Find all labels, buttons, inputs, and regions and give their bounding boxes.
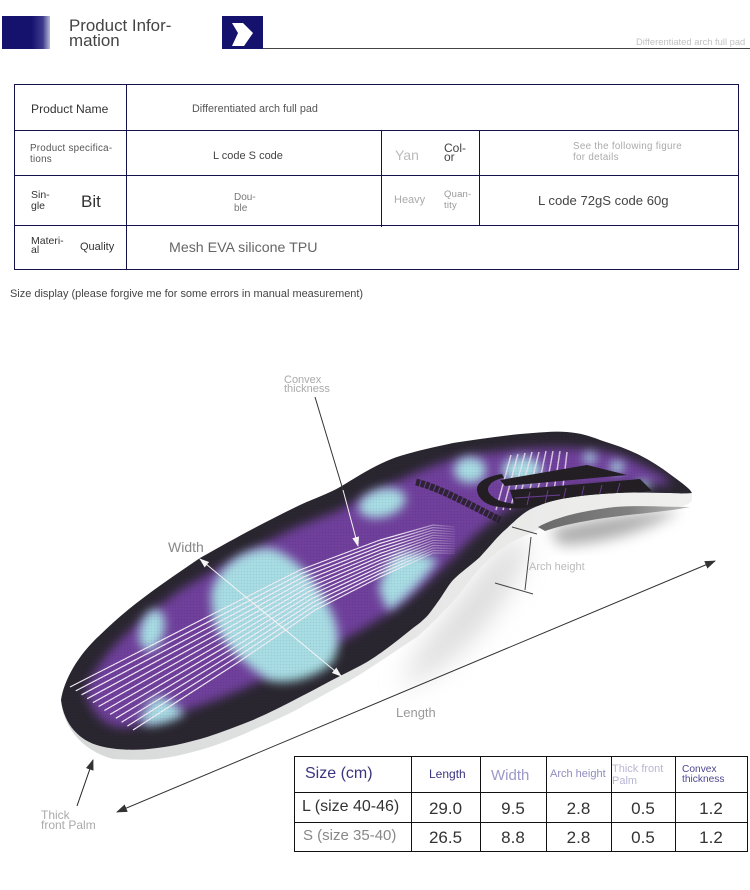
icon: blue gradient block: [2, 16, 50, 49]
value: size codes: L code S code: [213, 150, 283, 162]
insole diagram: [41, 374, 716, 832]
row: product specifications: [30, 143, 112, 165]
label: quality: Quality: [80, 241, 114, 253]
row: product name: Product Name: [31, 102, 108, 116]
header: width: Width: [491, 767, 529, 784]
label: quantity: Quan-: [444, 189, 471, 200]
heading: product information: Product Infor-: [69, 16, 171, 35]
label: convex thickness: thickness: [284, 383, 330, 395]
thick front palm arrow: [77, 760, 93, 806]
arch underside: [538, 506, 690, 531]
row: material label: [31, 235, 64, 256]
value: color: See the following figure: [573, 141, 682, 152]
size table: [294, 756, 748, 852]
row values: S: 26.5: [429, 828, 462, 847]
logo mark: [477, 465, 652, 508]
label: color Yan: Yan: [395, 147, 419, 163]
arch shadow: [400, 510, 680, 690]
row: material label: al: [31, 244, 39, 256]
label: color: Col-: [444, 141, 466, 155]
row: product specifications: tions: [30, 154, 52, 165]
label: quantity: [444, 189, 471, 211]
label: width: Width: [168, 539, 204, 555]
header: length: Length: [429, 767, 466, 781]
row values: L: 2.8: [567, 799, 590, 818]
length arrow: [117, 561, 715, 812]
row values: L: [429, 799, 723, 818]
header: size: Size (cm): [305, 765, 373, 782]
row label: L: L (size 40-46): [302, 798, 399, 815]
label: heavy: Heavy: [394, 194, 425, 206]
value: color: for details: [573, 152, 619, 163]
row values: L: 1.2: [699, 799, 723, 818]
header: convex thickness: [682, 764, 724, 785]
white flex lines: [70, 525, 455, 730]
row: single bit label: [31, 189, 50, 212]
row values: S: 2.8: [567, 828, 590, 847]
size display note: Size display (please forgive me for some errors in manual measurement): [10, 288, 363, 300]
label: thick front palm: front Palm: [41, 818, 96, 832]
convex thickness arrow: [315, 397, 358, 546]
row values: S: 0.5: [631, 828, 655, 847]
insole foam side: [61, 470, 692, 760]
header: thick front palm: Thick front: [612, 763, 663, 775]
insole top surface: [61, 432, 692, 750]
row: material label: Materi-: [31, 235, 64, 247]
value: product name: Differentiated arch full pad: [192, 103, 318, 115]
label: color: or: [444, 150, 455, 164]
mesh texture: [72, 451, 659, 730]
row: product specifications: Product specifica-: [30, 143, 112, 154]
row values: S: [429, 828, 723, 847]
label: bit: Bit: [81, 192, 101, 211]
logo letter slits: [515, 483, 620, 505]
value: double: Dou-: [234, 192, 256, 203]
label: quantity: tity: [444, 200, 457, 211]
product specification table: [14, 84, 739, 270]
header: arch height: Arch height: [550, 768, 606, 780]
label: convex thickness: Convex: [284, 374, 322, 386]
label: color: [444, 141, 466, 164]
header: thick front palm: [612, 763, 664, 787]
purple print: [85, 448, 670, 727]
value: weight: L code 72gS code 60g: [538, 193, 669, 208]
row values: L: 9.5: [501, 799, 525, 818]
row: single bit label: gle: [31, 200, 45, 212]
subtitle: Differentiated arch full pad: [636, 36, 745, 47]
icon: chevron arrow box: [222, 16, 263, 49]
value: color: [573, 141, 682, 163]
header: convex thickness: Convex: [682, 764, 717, 775]
value: material: Mesh EVA silicone TPU: [169, 240, 318, 256]
brand text band: [416, 482, 500, 520]
row: single bit label: Sin-: [31, 189, 50, 201]
header rule: [263, 48, 750, 49]
label: thick front palm: Thick: [41, 808, 71, 822]
header: thick front palm: Palm: [612, 775, 637, 787]
blue highlights: [135, 452, 651, 725]
header: convex thickness: thickness: [682, 774, 724, 785]
value: double: ble: [234, 203, 247, 214]
value: double: [234, 192, 256, 214]
width arrow: [200, 559, 341, 676]
row label: S: S (size 35-40): [303, 827, 396, 844]
heading: product information: mation: [69, 31, 120, 50]
section header: [2, 16, 750, 50]
row values: L: 29.0: [429, 799, 462, 818]
heel logo stripes: [496, 451, 567, 510]
row values: S: 1.2: [699, 828, 723, 847]
label: arch height: Arch height: [529, 561, 585, 573]
row values: S: 8.8: [501, 828, 525, 847]
row values: L: 0.5: [631, 799, 655, 818]
heading: product information: [69, 16, 171, 50]
label: length: Length: [396, 705, 436, 720]
arch height marker: [495, 527, 537, 594]
